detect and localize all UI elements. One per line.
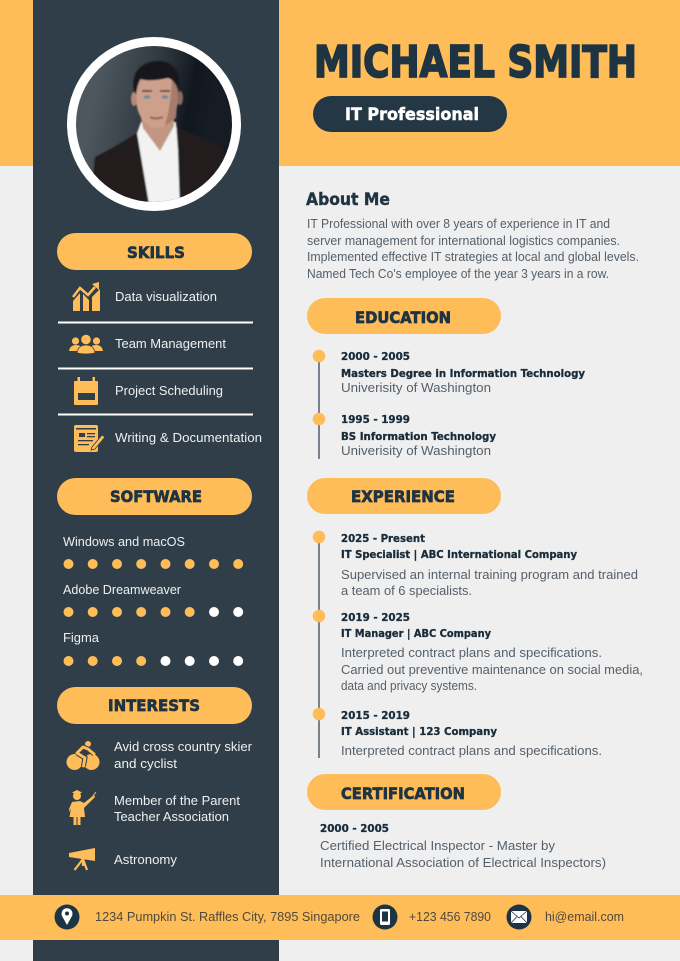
skills heading: [57, 233, 252, 270]
profile photo: [67, 37, 241, 211]
certification heading: [307, 774, 501, 810]
experience timeline: data and privacy systems.: [341, 679, 477, 693]
interests heading: INTERESTS: [108, 696, 200, 715]
interests list: Avid cross country skier: [114, 739, 253, 754]
about me: About Me: [306, 190, 390, 210]
about me: Implemented effective IT strategies at local and global levels.: [307, 250, 639, 264]
education heading: EDUCATION: [355, 308, 451, 327]
icon: email: [506, 904, 532, 930]
experience timeline: Carried out preventive maintenance on social media,: [341, 663, 643, 677]
icon: teacher: [69, 790, 96, 825]
certification heading: CERTIFICATION: [341, 784, 465, 803]
experience timeline: 2025 - Present: [341, 533, 425, 545]
footer contacts: hi@email.com: [545, 909, 624, 924]
icon: calendar: [74, 377, 98, 405]
icon: writing: [74, 425, 105, 452]
icon: location: [54, 904, 80, 930]
software ratings: Figma: [63, 630, 100, 645]
experience timeline: IT Manager | ABC Company: [341, 628, 491, 640]
skills list: [58, 282, 262, 452]
experience timeline: IT Assistant | 123 Company: [341, 726, 497, 738]
education timeline: Univerisity of Washington: [341, 381, 491, 395]
education timeline: BS Information Technology: [341, 431, 496, 443]
role pill: IT Professional: [345, 105, 479, 125]
certification details: Certified Electrical Inspector - Master by: [320, 839, 556, 853]
header band: [0, 0, 680, 166]
experience heading: EXPERIENCE: [351, 487, 455, 506]
experience timeline: Supervised an internal training program and trained: [341, 568, 638, 582]
interests heading: [57, 687, 252, 724]
about me: Named Tech Co's employee of the year 3 years in a row.: [307, 267, 609, 281]
education timeline: Univerisity of Washington: [341, 444, 491, 458]
experience timeline: 2015 - 2019: [341, 710, 410, 722]
footer contacts: +123 456 7890: [409, 909, 491, 924]
skills heading: SKILLS: [127, 243, 185, 262]
icon: team: [69, 335, 103, 354]
role pill: [313, 96, 507, 132]
footer contacts: 1234 Pumpkin St. Raffles City, 7895 Singapore: [95, 909, 360, 924]
certification details: 2000 - 2005: [320, 823, 389, 835]
certification details: [320, 823, 606, 870]
icon: telescope: [69, 848, 95, 870]
skills list: Data visualization: [115, 289, 217, 304]
interests list: Teacher Association: [114, 809, 229, 824]
experience heading: [307, 478, 501, 514]
experience timeline: Interpreted contract plans and specifications.: [341, 744, 602, 758]
interests list: Astronomy: [114, 852, 177, 867]
experience timeline: 2019 - 2025: [341, 612, 410, 624]
education timeline: Masters Degree in Information Technology: [341, 368, 585, 380]
software ratings: Adobe Dreamweaver: [63, 582, 182, 597]
icon: chart: [73, 282, 100, 311]
skills list: Team Management: [115, 336, 226, 351]
software ratings: Windows and macOS: [63, 534, 185, 549]
footer contacts: [54, 904, 624, 930]
experience timeline: a team of 6 specialists.: [341, 584, 472, 598]
software heading: SOFTWARE: [110, 487, 202, 506]
experience timeline: IT Specialist | ABC International Company: [341, 549, 577, 561]
interests list: and cyclist: [114, 756, 177, 771]
education timeline: [313, 350, 585, 459]
about me: IT Professional with over 8 years of experience in IT and: [307, 217, 610, 231]
skills list: Writing & Documentation: [115, 430, 262, 445]
interests list: [66, 739, 253, 870]
certification details: International Association of Electrical Inspectors): [320, 856, 606, 870]
software heading: [57, 478, 252, 515]
education heading: [307, 298, 501, 334]
about me: [306, 190, 639, 281]
software ratings: [63, 534, 243, 666]
interests list: Member of the Parent: [114, 793, 240, 808]
experience timeline: Interpreted contract plans and specifications.: [341, 646, 602, 660]
footer band: [0, 895, 680, 940]
experience timeline: [313, 531, 643, 758]
about me: server management for international logistics companies.: [307, 234, 620, 248]
education timeline: 1995 - 1999: [341, 414, 410, 426]
sidebar panel: [33, 0, 279, 961]
icon: cyclist: [66, 741, 100, 770]
skills list: Project Scheduling: [115, 383, 223, 398]
education timeline: 2000 - 2005: [341, 351, 410, 363]
icon: phone: [372, 904, 398, 930]
